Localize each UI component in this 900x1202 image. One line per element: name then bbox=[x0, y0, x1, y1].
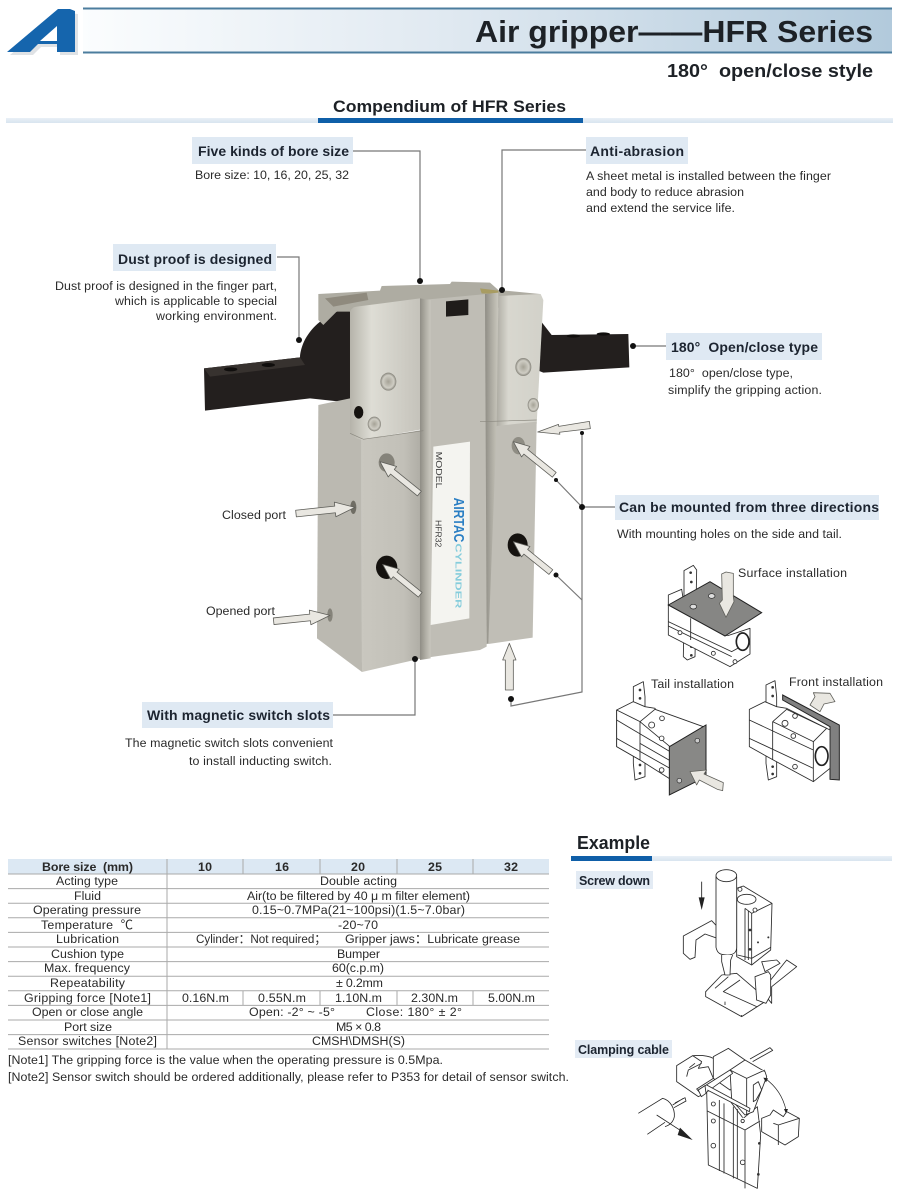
rear top of body bbox=[318, 282, 540, 325]
section heading: compendium: Compendium of HFR Series bbox=[333, 97, 566, 116]
callout: three directions: With mounting holes on the side and tail. bbox=[617, 527, 842, 541]
callout: 180 open/close type: simplify the gripping action. bbox=[668, 383, 822, 397]
section heading: example: Example bbox=[577, 833, 650, 853]
table parameter column: Lubrication bbox=[56, 932, 119, 946]
label: tail installation: Tail installation bbox=[651, 677, 734, 691]
table header row: 32 bbox=[504, 860, 518, 874]
table value columns: 5.00N.m bbox=[488, 991, 535, 1005]
callout: magnetic switch slots: to install inducting switch. bbox=[189, 754, 332, 768]
table value columns: 0.15~0.7MPa(21~100psi)(1.5~7.0bar) bbox=[252, 903, 465, 917]
model label: CYLINDER bbox=[454, 543, 464, 609]
table value columns: 0.55N.m bbox=[258, 991, 306, 1005]
callout: dust proof: Dust proof is designed in the finger part, bbox=[55, 279, 277, 293]
callout: dust proof: Dust proof is designed bbox=[118, 251, 272, 267]
screws and ports bbox=[327, 358, 539, 622]
table header row: 10 bbox=[198, 860, 212, 874]
subtitle: 180° open/close style bbox=[667, 61, 873, 81]
section heading: compendium bbox=[6, 97, 893, 123]
table value columns: ± 0.2mm bbox=[336, 976, 383, 990]
callout: dust proof: working environment. bbox=[155, 309, 277, 323]
port labels: Opened port bbox=[206, 604, 276, 618]
table value columns: Air(to be filtered by 40 μ m filter element) bbox=[247, 889, 470, 903]
table value columns: Gripper jaws：Lubricate grease bbox=[345, 932, 520, 946]
header band bbox=[83, 8, 892, 54]
table parameter column: Port size bbox=[64, 1020, 112, 1034]
callout: 180 open/close type bbox=[666, 333, 822, 397]
table notes: [Note2] Sensor switch should be ordered additionally, please refer to P353 for detail of sensor switch. bbox=[8, 1070, 569, 1084]
table notes: [Note1] The gripping force is the value when the operating pressure is 0.5Mpa. bbox=[8, 1053, 443, 1067]
callout: magnetic switch slots: The magnetic switch slots convenient bbox=[125, 736, 334, 750]
callout: magnetic switch slots bbox=[125, 702, 334, 768]
callout: five kinds of bore size bbox=[192, 137, 353, 182]
table value columns: Double acting bbox=[320, 874, 397, 888]
lower left front face bbox=[362, 430, 422, 672]
right black finger bbox=[537, 320, 629, 373]
callout: anti-abrasion bbox=[586, 137, 831, 215]
table value columns: Open: -2° ~ -5° bbox=[249, 1005, 335, 1019]
table header row: Bore size (mm) bbox=[42, 860, 133, 874]
table header row: 16 bbox=[275, 860, 289, 874]
table value columns: 60(c.p.m) bbox=[332, 961, 384, 975]
port arrows bbox=[273, 420, 591, 690]
table value columns: CMSH\DMSH(S) bbox=[312, 1034, 405, 1048]
diagram: surface installation bbox=[668, 565, 762, 667]
callout: magnetic switch slots: With magnetic switch slots bbox=[147, 707, 330, 723]
table parameter column: Operating pressure bbox=[33, 903, 141, 917]
diagram: tail installation bbox=[617, 682, 723, 795]
centre section bbox=[422, 294, 487, 658]
table header row bbox=[42, 860, 518, 874]
model label: AIRTAC bbox=[450, 498, 466, 543]
model label bbox=[431, 442, 470, 625]
callout: anti-abrasion: A sheet metal is installed between the finger bbox=[586, 169, 831, 183]
table value columns: 0.16N.m bbox=[182, 991, 229, 1005]
port labels: Closed port bbox=[222, 508, 287, 522]
table value columns bbox=[182, 874, 535, 1048]
callout: anti-abrasion: and extend the service life. bbox=[586, 201, 735, 215]
table parameter column: Temperature ℃ bbox=[41, 918, 133, 932]
callout: anti-abrasion: Anti-abrasion bbox=[590, 143, 684, 159]
table parameter column: Max. frequency bbox=[44, 961, 131, 975]
callout: 180 open/close type: 180° Open/close type bbox=[671, 339, 818, 355]
diagram: clamping cable bbox=[638, 1048, 799, 1188]
table value columns: 1.10N.m bbox=[335, 991, 382, 1005]
lower right face bbox=[488, 422, 537, 644]
label: screw down: Screw down bbox=[579, 874, 650, 888]
callout: three directions: Can be mounted from three directions bbox=[619, 499, 879, 515]
label: front installation: Front installation bbox=[789, 675, 883, 689]
callout: dust proof: which is applicable to special bbox=[114, 294, 277, 308]
table parameter column: Acting type bbox=[56, 874, 118, 888]
callout: dust proof bbox=[55, 244, 277, 323]
table parameter column: Sensor switches [Note2] bbox=[18, 1034, 157, 1048]
table notes bbox=[8, 1053, 569, 1084]
label: clamping cable: Clamping cable bbox=[578, 1043, 669, 1057]
leader lines bbox=[277, 150, 667, 715]
table parameter column: Open or close angle bbox=[32, 1005, 143, 1019]
label: surface installation: Surface installation bbox=[738, 566, 847, 580]
table parameter column: Repeatability bbox=[50, 976, 126, 990]
main product photo: gripper bbox=[204, 282, 629, 690]
diagram: screw down bbox=[683, 870, 797, 1017]
logo bbox=[7, 9, 78, 55]
diagram: front installation bbox=[749, 681, 839, 782]
table value columns: Bumper bbox=[337, 947, 380, 961]
callout: five kinds of bore size: Five kinds of bore size bbox=[198, 143, 349, 159]
table parameter column bbox=[18, 874, 157, 1048]
table value columns: M5 × 0.8 bbox=[336, 1020, 381, 1034]
table parameter column: Fluid bbox=[74, 889, 101, 903]
left cap bbox=[350, 298, 422, 440]
right cap bbox=[497, 294, 543, 427]
table parameter column: Cushion type bbox=[51, 947, 124, 961]
model label: MODEL bbox=[434, 452, 443, 489]
table value columns: -20~70 bbox=[338, 918, 378, 932]
title: Air gripper——HFR Series bbox=[475, 14, 873, 49]
lower left side face bbox=[317, 398, 362, 672]
table value columns: Cylinder：Not required； bbox=[196, 932, 326, 946]
callout: anti-abrasion: and body to reduce abrasion bbox=[586, 185, 744, 199]
callout: three directions bbox=[615, 495, 879, 541]
section heading: example bbox=[571, 833, 892, 861]
table value columns: Close: 180° ± 2° bbox=[366, 1005, 462, 1019]
spec table bbox=[8, 859, 549, 1049]
left black finger bbox=[204, 307, 357, 411]
model label: HFR32 bbox=[434, 520, 443, 548]
callout: five kinds of bore size: Bore size: 10, 16, 20, 25, 32 bbox=[195, 168, 349, 182]
callout: 180 open/close type: 180° open/close type, bbox=[669, 366, 793, 380]
port labels bbox=[206, 508, 287, 618]
top black block bbox=[446, 299, 468, 317]
table value columns: 2.30N.m bbox=[411, 991, 458, 1005]
table header row: 20 bbox=[351, 860, 365, 874]
table parameter column: Gripping force [Note1] bbox=[24, 991, 151, 1005]
table header row: 25 bbox=[428, 860, 442, 874]
